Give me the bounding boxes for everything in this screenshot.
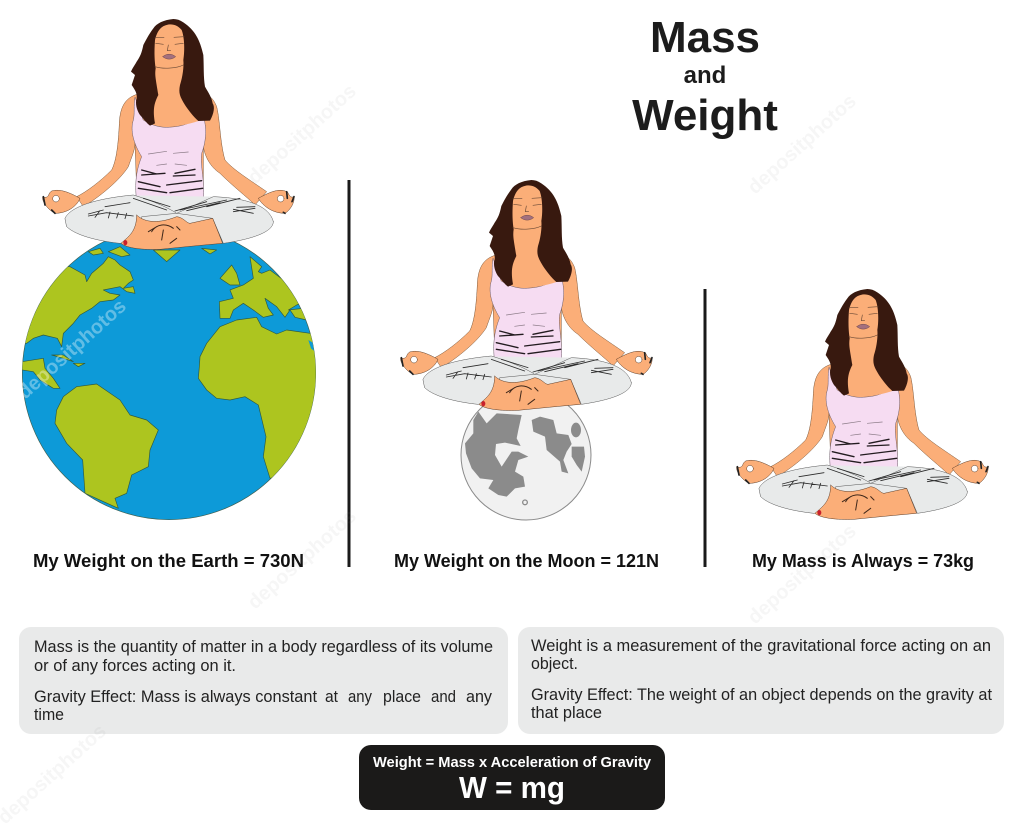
- panel: mass definition: at: [325, 688, 338, 706]
- panel: mass definition: Mass is the quantity of matter in a body regardless of its volume: [34, 638, 493, 656]
- title: Weight: [632, 91, 778, 140]
- title: [632, 13, 778, 140]
- watermarks: [0, 80, 861, 829]
- panel: weight definition: Gravity Effect: The weight of an object depends on the gravity at: [531, 686, 992, 704]
- label: moon weight: My Weight on the Moon = 121N: [394, 550, 659, 571]
- panel: mass definition: any: [348, 688, 373, 706]
- formula box: W = mg: [459, 770, 565, 805]
- formula box: Weight = Mass x Acceleration of Gravity: [373, 754, 652, 771]
- panel: weight definition: [518, 627, 1004, 734]
- divider right: [704, 289, 706, 567]
- earth globe: [22, 235, 316, 520]
- panel: weight definition: Weight is a measurement of the gravitational force acting on an: [531, 637, 991, 655]
- panel: mass definition: and: [431, 688, 456, 706]
- panel: weight definition: that place: [531, 704, 602, 722]
- panel: weight definition: object.: [531, 655, 578, 673]
- woman floating: [737, 289, 988, 519]
- label: mass: My Mass is Always = 73kg: [752, 550, 974, 571]
- panel: mass definition: [19, 627, 508, 734]
- panel: mass definition: time: [34, 706, 64, 724]
- title: Mass: [650, 13, 760, 62]
- label: earth weight: My Weight on the Earth = 730N: [33, 550, 304, 571]
- watermarks: depositphotos: [744, 90, 861, 199]
- panel: mass definition: or of any forces acting on it.: [34, 657, 236, 675]
- watermarks: depositphotos: [244, 80, 361, 189]
- watermarks: depositphotos: [14, 295, 131, 404]
- formula box: [359, 745, 665, 810]
- woman on moon: [401, 180, 652, 410]
- woman on earth: [43, 19, 294, 249]
- panel: mass definition: Gravity Effect: Mass is always constant: [34, 688, 317, 706]
- title: and: [684, 62, 726, 89]
- watermarks: depositphotos: [244, 505, 361, 614]
- panel: mass definition: any: [466, 688, 493, 706]
- panel: mass definition: place: [383, 688, 421, 706]
- watermarks: depositphotos: [744, 520, 861, 629]
- moon: [460, 406, 592, 520]
- divider left: [348, 180, 350, 567]
